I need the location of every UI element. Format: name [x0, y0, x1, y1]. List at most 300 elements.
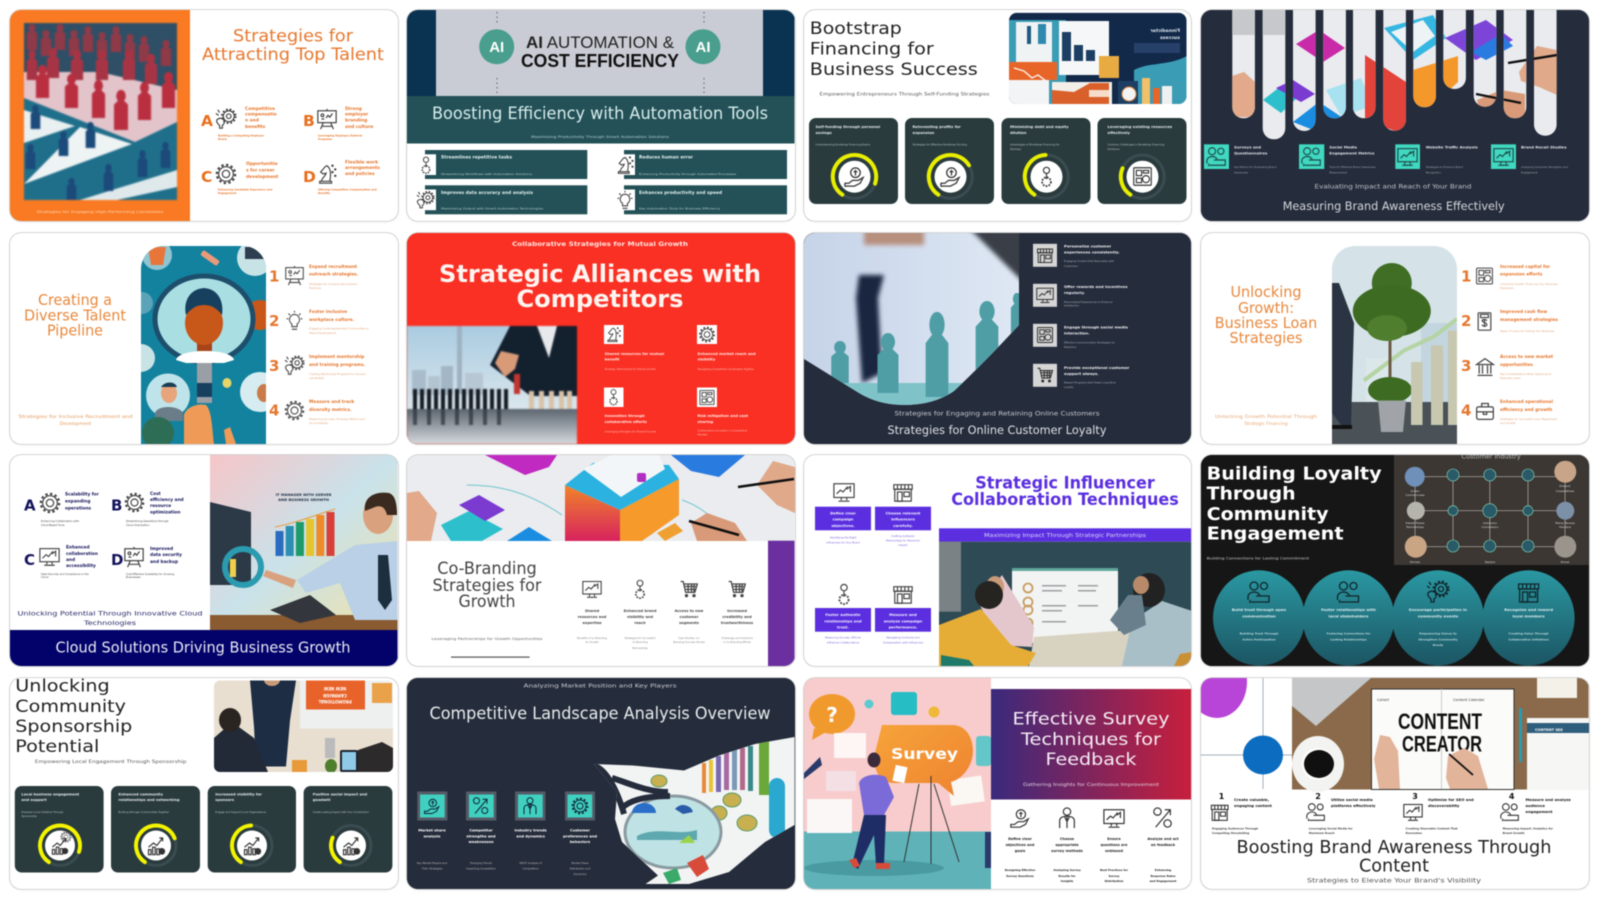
metric: surveys: Surveys and: [1234, 144, 1261, 149]
title: Competitive Landscape Analysis Overview: [430, 704, 770, 722]
technique: objectives: Designing Effective: [1004, 868, 1035, 872]
action: rewards: Personalized Experiences to Enhance: [1064, 299, 1112, 303]
item A: n and: [245, 118, 259, 124]
item B: Cloud Automation: [126, 523, 150, 527]
benefit: customer segments: Case Studies: Co-: [678, 636, 700, 640]
card: social impact: Positive social impact and: [313, 792, 368, 796]
action: personalize: Customers: [1064, 263, 1078, 267]
background: [407, 232, 794, 444]
card: visibility: Increased visibility for: [215, 792, 262, 796]
benefit: reduces error: [618, 150, 787, 179]
banner: Maximizing Impact Through Strategic Partnerships: [984, 533, 1146, 539]
factor: competitor strengths: Impacting Competition: [466, 866, 496, 870]
item B: [303, 106, 373, 141]
card: minimizing debt: dilution: [1010, 130, 1026, 135]
card: social impact: [304, 786, 392, 873]
title: Measuring Brand Awareness Effectively: [1283, 199, 1505, 213]
tip: define objectives: Influencers for Your Brand: [826, 540, 860, 544]
item B: B: [303, 112, 315, 130]
title: Attracting Top Talent: [202, 45, 384, 65]
title panel: Techniques for: [1019, 730, 1161, 750]
item B: Streamlining Operations through: [126, 519, 169, 523]
benefit: risk mitigation: [697, 387, 748, 436]
step 4: [1501, 792, 1571, 834]
step 4: and Growth: [1500, 420, 1516, 424]
technique: act on feedback: and Engagement: [1149, 878, 1177, 882]
card: local engagement: Local business engagement: [21, 792, 79, 796]
benefit: market reach: visibility: [698, 357, 716, 361]
panel: slide 15, survey techniques: [804, 678, 1191, 888]
card: reinvesting: expansion: [912, 130, 934, 135]
item C: development: [246, 174, 278, 180]
title: Creating a: [38, 290, 112, 308]
title: Boosting Brand Awareness Through: [1236, 838, 1552, 858]
background: [1201, 455, 1588, 666]
title: Bootstrap: [809, 19, 901, 39]
subtitle: Strategies to Elevate Your Brand's Visibility: [1307, 878, 1482, 884]
action: social media: [1032, 323, 1128, 348]
action: support: Provide exceptional customer: [1064, 364, 1129, 369]
tip: authentic relationships: Foster authentic: [825, 612, 860, 617]
action: social media: Retention: [1064, 344, 1076, 348]
item B: [111, 491, 184, 527]
title: Co-Branding: [437, 559, 537, 579]
title: Content: [1359, 856, 1429, 876]
tip: measure performance: analyze campaign: [883, 618, 922, 623]
background: [407, 678, 794, 888]
tip: authentic relationships: Influencer Collaborations: [826, 640, 859, 644]
item D: [111, 546, 182, 579]
factor: customer preferences: Dynamics: [574, 872, 587, 876]
step 1: Practices: [309, 286, 322, 290]
item C: s for career: [246, 168, 275, 174]
title: Unlocking: [1230, 282, 1302, 300]
subtitle: Evaluating Impact and Reach of Your Brand: [1314, 183, 1472, 191]
item C: C: [24, 551, 35, 569]
action: social media: Effective Communication Strategies for: [1064, 340, 1115, 344]
card: leveraging resources: effectively: [1107, 130, 1130, 135]
tip: choose influencers: Impact: [898, 543, 907, 547]
benefit: customer segments: Access to new: [675, 609, 704, 613]
item A: compensatio: [245, 112, 277, 118]
title: Engagement: [1207, 523, 1344, 544]
card: leveraging resources: Solutions: [1107, 147, 1120, 151]
photo: promotional campaign presentation: CAMPAIGN: [323, 692, 347, 698]
step 1: 1: [1219, 792, 1225, 800]
item A: Brand: [218, 137, 227, 141]
technique: objectives: Survey Questions: [1006, 874, 1034, 878]
step 1: Create valuable,: [1234, 796, 1270, 802]
step 1: [1211, 792, 1272, 834]
illustration: financial documents: [1008, 13, 1186, 105]
item B: employer: [345, 112, 369, 118]
factor: customer preferences: [563, 791, 597, 876]
item D: Cost-Effective Scalability for Growing: [126, 572, 174, 576]
item C: [24, 545, 98, 579]
benefit: accuracy: Improves data accuracy and analysis: [441, 190, 534, 195]
item B: B: [111, 497, 122, 515]
step 3: Creating Mentorship Programs for Diverse: [309, 372, 366, 376]
card: minimizing debt: Advantages of Bootstrap Financing for: [1010, 143, 1060, 147]
title: [24, 290, 126, 339]
item D: Flexible work: [345, 159, 378, 165]
diagram: customer network photo: Emsal: [1561, 560, 1569, 564]
item D: arrangements: [345, 165, 380, 171]
factor: customer preferences: preferences and: [563, 834, 597, 838]
benefit: credibility: Increased: [727, 609, 747, 613]
kicker: Collaborative Strategies for Mutual Growth: [512, 242, 688, 248]
step 3: [1461, 354, 1553, 380]
benefit: shared resources: expertise: [582, 621, 602, 625]
action: support: Loyalty: [1064, 384, 1073, 388]
step 2: Leveraging Social Media for: [1309, 826, 1353, 830]
bubble: open communication: communication: [1242, 614, 1276, 619]
bubble: open communication: Active Participation: [1242, 638, 1276, 642]
item A: [201, 106, 277, 141]
step 2: [1461, 308, 1558, 332]
factor: industry trends: Industry trends: [514, 828, 548, 832]
step 4: Measuring Success: Diversity Metrics and: [309, 416, 365, 420]
step 3: discoverability: [1428, 802, 1460, 808]
tip: measure performance: Navigating Contracts and: [886, 636, 919, 640]
benefit: customer segments: segments: [679, 621, 699, 625]
item A: A: [201, 112, 213, 130]
step 3: 3: [269, 356, 279, 374]
illustration: person presenting a survey: ?: [826, 702, 837, 726]
item A: Competitive: [245, 106, 275, 112]
benefit: accuracy: [417, 185, 587, 214]
step 2: [1307, 792, 1376, 834]
card: self-funding: [808, 118, 898, 207]
card: local engagement: [15, 786, 104, 873]
item A: A: [24, 497, 36, 515]
panel: slide 13, community sponsorship: [10, 678, 398, 888]
background: [804, 232, 1191, 444]
step 2: 2: [1461, 312, 1471, 330]
card: minimizing debt: Minimizing debt and equity: [1010, 124, 1069, 129]
panel: slide 7, online customer loyalty: [804, 232, 1191, 444]
bubble: community events: Empowering Voices to: [1419, 631, 1457, 635]
technique: methods: [1051, 807, 1082, 882]
step 3: opportunities: [1500, 362, 1533, 368]
tip: authentic relationships: Measuring Success: KPIs for: [824, 636, 862, 640]
step 1: Compelling Storytelling: [1212, 830, 1249, 834]
diagram: customer network photo: Cooperatives: [1556, 489, 1575, 493]
step 4: Enhanced operational: [1500, 398, 1553, 404]
item B: resource: [150, 503, 171, 509]
action: rewards: Satisfaction: [1064, 303, 1079, 307]
diagram: customer network photo: Harvaris: [1559, 525, 1571, 529]
step 4: Accountability: [309, 420, 328, 424]
benefit: innovation: collaborative efforts: [605, 420, 648, 424]
panel: slide 3, bootstrap financing: [804, 10, 1191, 221]
factor: competitor strengths: strengths and: [466, 834, 496, 838]
tip: measure performance: performance.: [888, 624, 917, 629]
bubble: local stakeholders: Fostering Connections for: [1327, 631, 1371, 635]
benefit: customer segments: Branding Success Stories: [673, 640, 706, 644]
item A: benefits: [245, 124, 266, 130]
technique: unbiased: unbiased: [1104, 848, 1123, 852]
item A: [24, 492, 100, 527]
factor: industry trends: [514, 791, 548, 870]
benefit: productivity: Key Automation Tools for Business Efficiency: [639, 207, 720, 211]
panel: slide 6, strategic alliances: [407, 232, 794, 444]
title: Business Loan: [1215, 314, 1317, 332]
benefit: brand visibility: reach: [634, 621, 646, 625]
step 4: Measure and track: [309, 398, 354, 404]
tip: choose influencers: [874, 485, 930, 547]
photo: businessman beside a tree and rising bars: [1332, 246, 1457, 444]
card: community relationships: [111, 786, 200, 873]
metric: social media: Tools for Effective Brand Awareness: [1329, 165, 1376, 169]
step 3: Business Loans: [1500, 376, 1521, 380]
step 4: [269, 398, 365, 424]
action: support: [1032, 363, 1129, 388]
factor: customer preferences: behaviors: [570, 840, 591, 844]
subtitle: Leveraging Partnerships for Growth Opportunities: [432, 637, 543, 641]
bubble: loyal members: [1483, 570, 1575, 666]
panel: slide 1, attracting top talent: [10, 10, 398, 221]
title: Building Loyalty: [1207, 463, 1382, 484]
photo: content creator notebook: CREATOR: [1402, 731, 1482, 756]
kicker: Analyzing Market Position and Key Players: [524, 683, 677, 689]
benefit: risk mitigation: sharing: [698, 420, 714, 424]
benefit: shared resources: resources and: [578, 615, 607, 619]
step 4: Strategies for Successful Loan Repayment: [1500, 416, 1557, 420]
item B: and culture: [345, 124, 373, 130]
step 2: Foster inclusive: [309, 308, 347, 314]
tip: choose influencers: Partnerships for Maximum: [885, 538, 920, 542]
bubble: loyal members: loyal members: [1512, 614, 1545, 619]
title: Financing for: [809, 39, 933, 59]
tip: choose influencers: carefully.: [893, 523, 913, 528]
title band: Cloud Solutions Driving Business Growth: [56, 638, 350, 656]
action: rewards: [1032, 283, 1128, 307]
metric: surveys: Questionnaires: [1234, 151, 1268, 156]
photo: IT manager with growth chart: AND BUSINESS GROWTH: [278, 498, 329, 502]
photo: IT manager with growth chart: [210, 455, 398, 630]
step 2: Maximum Reach: [1309, 830, 1335, 834]
technique: unbiased: [1100, 809, 1128, 882]
benefit: market reach: Navigating Competitive Landscapes Together: [698, 366, 755, 370]
bubble: loyal members: Recognize and reward: [1504, 607, 1553, 612]
title: Community: [15, 696, 126, 716]
illustration: person presenting a survey: [804, 678, 990, 888]
step 4: 4: [1461, 401, 1471, 419]
item B: Cost: [150, 491, 161, 497]
benefit: market reach: Enhanced market reach and: [698, 352, 756, 356]
bubble: loyal members: Creating Value Through: [1509, 631, 1549, 635]
metric: website traffic: [1395, 144, 1478, 174]
item D: and backup: [150, 559, 178, 565]
factor: market share: Market share: [418, 828, 446, 832]
step 2: Utilize social media: [1331, 796, 1373, 802]
subtitle: Empowering Local Engagement Through Sponsorship: [35, 758, 187, 764]
subtitle: Development: [60, 420, 91, 426]
subtitle: Unlocking Growth Potential Through: [1215, 414, 1317, 420]
title panel: [990, 688, 1191, 799]
step 4: diversity metrics.: [309, 406, 352, 412]
banner: [938, 528, 1191, 542]
title: Strategies: [1230, 328, 1303, 346]
factor: customer preferences: Market Share: [571, 860, 589, 864]
bubble: community events: Encourage participation in: [1409, 607, 1467, 612]
technique: methods: Choose: [1059, 836, 1074, 840]
step 2: platforms effectively: [1331, 802, 1376, 808]
underline: [451, 656, 530, 658]
title: [439, 260, 761, 312]
benefit: customer segments: customer: [680, 615, 699, 619]
technique: methods: Results for: [1058, 874, 1076, 878]
title: [202, 27, 384, 65]
step 4: Measuring Impact: Analytics for: [1503, 826, 1554, 830]
factor: competitor strengths: [466, 791, 496, 870]
illustration: financial documents: success: [1159, 36, 1180, 41]
benefit: reduces error: Enhancing Productivity through Automated Processes: [639, 172, 737, 176]
benefit: shared resources: Benefits of Co-Branding: [577, 636, 607, 640]
benefit: innovation: [604, 387, 657, 433]
step 1: outreach strategies.: [309, 271, 359, 277]
benefit: credibility: trustworthiness: [721, 621, 753, 625]
technique: act on feedback: Analyze and act: [1147, 836, 1178, 840]
factor: competitor strengths: Emerging Trends: [470, 860, 493, 864]
benefit: shared resources: [577, 582, 607, 644]
benefit: streamlines: [422, 150, 587, 179]
card: social impact: goodwill: [313, 798, 330, 802]
benefit: shared resources: [604, 324, 664, 370]
illustration: financial documents: Finnadictar: [1149, 28, 1180, 34]
tip: measure performance: Measure and: [889, 612, 917, 617]
diagram: customer network photo: Partnerships: [1406, 525, 1424, 529]
step 1: Engaging Audiences Through: [1212, 826, 1258, 830]
step 3: Candidates: [309, 376, 325, 380]
photo: promotional campaign presentation: PROMOTIONAL: [318, 698, 352, 704]
tip: choose influencers: Crafting Authentic: [891, 534, 915, 538]
step 1: Unlocking Growth: Financing Your Business: [1500, 282, 1558, 286]
metric: brand recall: Engagement: [1521, 170, 1538, 174]
step 2: Engaging Underrepresented Communities in: [309, 326, 369, 330]
step 4: audience: [1526, 802, 1545, 808]
card: local engagement: Empower Local Initiative Through: [21, 810, 64, 814]
step 1: Expansion: [1500, 286, 1514, 290]
technique: objectives: objectives and: [1005, 842, 1034, 846]
technique: act on feedback: Response Rates: [1150, 874, 1175, 878]
step 3: 3: [1412, 792, 1418, 800]
step 3: and training programs.: [309, 362, 366, 368]
title: Collaboration Techniques: [951, 490, 1178, 509]
subtitle: Empowering Entrepreneurs Through Self-Funding Strategies: [819, 92, 990, 98]
metric: website traffic: Recognition: [1426, 170, 1441, 174]
benefit: credibility: in Co-Branding Efforts: [723, 640, 751, 644]
photo: AI automation and cost efficiency sign: [407, 10, 794, 96]
card: self-funding: Self-funding through personal: [815, 124, 880, 129]
step 1: 1: [269, 267, 279, 285]
title panel: Gathering Insights for Continuous Improvement: [1022, 782, 1159, 788]
title: [1207, 463, 1382, 544]
card: community relationships: Building Stronger Communities Together: [118, 810, 170, 814]
title: Growth: [458, 592, 516, 612]
card: visibility: sponsors: [215, 798, 235, 802]
step 1: Increased capital for: [1500, 264, 1551, 270]
title: Strategies for Online Customer Loyalty: [887, 422, 1106, 436]
subtitle: Technologies: [83, 619, 137, 627]
item C: Engagement: [218, 191, 237, 195]
step 2: [269, 308, 369, 334]
title: Potential: [15, 736, 99, 756]
factor: competitor strengths: Competitor: [469, 828, 493, 832]
bubble: community events: Strengthen Community: [1418, 638, 1458, 642]
photo: AI automation and cost efficiency sign: AI: [696, 39, 710, 56]
title: Strategic Influencer: [975, 473, 1155, 492]
item B: efficiency and: [150, 497, 184, 503]
benefit: innovation: Leveraging Strengths for Shared Success: [605, 429, 657, 433]
photo: AI automation and cost efficiency sign: AI AUTOMATION &: [526, 33, 675, 52]
factor: market share: Key Market Players and: [417, 860, 448, 864]
metric: website traffic: Strategies to Enhance Brand: [1426, 165, 1463, 169]
item D: Benefits: [318, 191, 331, 195]
benefit: credibility: Challenges and Solutions: [721, 636, 753, 640]
title: Sponsorship: [15, 716, 132, 736]
technique: methods: appropriate: [1055, 842, 1079, 846]
factor: customer preferences: Distribution and: [570, 866, 591, 870]
tip: define objectives: objectives.: [831, 523, 855, 528]
title: Strategies for: [432, 576, 542, 596]
benefit: brand visibility: Co-Branding: [632, 640, 648, 644]
action: rewards: Offer rewards and incentives: [1064, 283, 1128, 288]
card: local engagement: Sponsorship: [21, 814, 37, 818]
metric: brand recall: [1491, 144, 1568, 174]
benefit: risk mitigation: Collaborative Innovation in Competitive: [698, 428, 748, 432]
subtitle: [18, 414, 133, 426]
photo: content creator notebook: Content Calendar: [1453, 698, 1485, 702]
step 2: management strategies: [1500, 316, 1558, 322]
benefit: shared resources: Strategic Partnerships for Mutual Growth: [605, 366, 656, 370]
bubble: community events: [1392, 570, 1484, 666]
subtitle: Building Connections for Lasting Commitment: [1207, 555, 1310, 560]
panel: slide 11, influencer collaboration: [804, 455, 1191, 666]
bubble: community events: community events: [1418, 614, 1459, 619]
item D: Improved: [150, 546, 173, 552]
diagram: customer network photo: Stpllyrs: [1485, 560, 1496, 564]
card: leveraging resources: Common Challenges in Bootstrap Financing: [1107, 143, 1164, 147]
photo: team meeting: [938, 542, 1192, 666]
photo: content creator notebook: [1292, 678, 1589, 792]
tip: choose influencers: influencers: [891, 517, 915, 522]
diagram: customer network photo: Autoenion: [1483, 521, 1497, 525]
step 3: Resonates: [1406, 830, 1422, 834]
bubble: local stakeholders: Foster relationships with: [1321, 607, 1376, 612]
panel: slide 10, co-branding: [407, 455, 794, 666]
metric: social media: Measurement: [1329, 170, 1347, 174]
title: Business Success: [809, 60, 977, 80]
title: [809, 19, 977, 80]
step 1: expansion efforts: [1500, 271, 1543, 277]
step 1: Expand recruitment: [309, 264, 357, 270]
tip: define objectives: Identifying the Right: [829, 535, 856, 539]
benefit: brand visibility: Strategies for Successful: [624, 636, 656, 640]
benefit: shared resources: Shared resources for mutual: [605, 352, 664, 356]
step 1: engaging content: [1234, 802, 1272, 808]
metric: website traffic: Website Traffic Analysis: [1426, 144, 1478, 149]
item C: [201, 161, 278, 195]
card: visibility: Engage and Support Local Organizations: [215, 810, 267, 814]
panel: slide 8, business loan strategies: [1201, 232, 1588, 444]
benefit: productivity: [618, 185, 787, 214]
panel: slide 4, brand awareness metrics: [1201, 10, 1588, 221]
tip: define objectives: [814, 484, 870, 544]
subtitle: Strategies for Inclusive Recruitment and: [18, 414, 133, 420]
title: [15, 676, 132, 756]
